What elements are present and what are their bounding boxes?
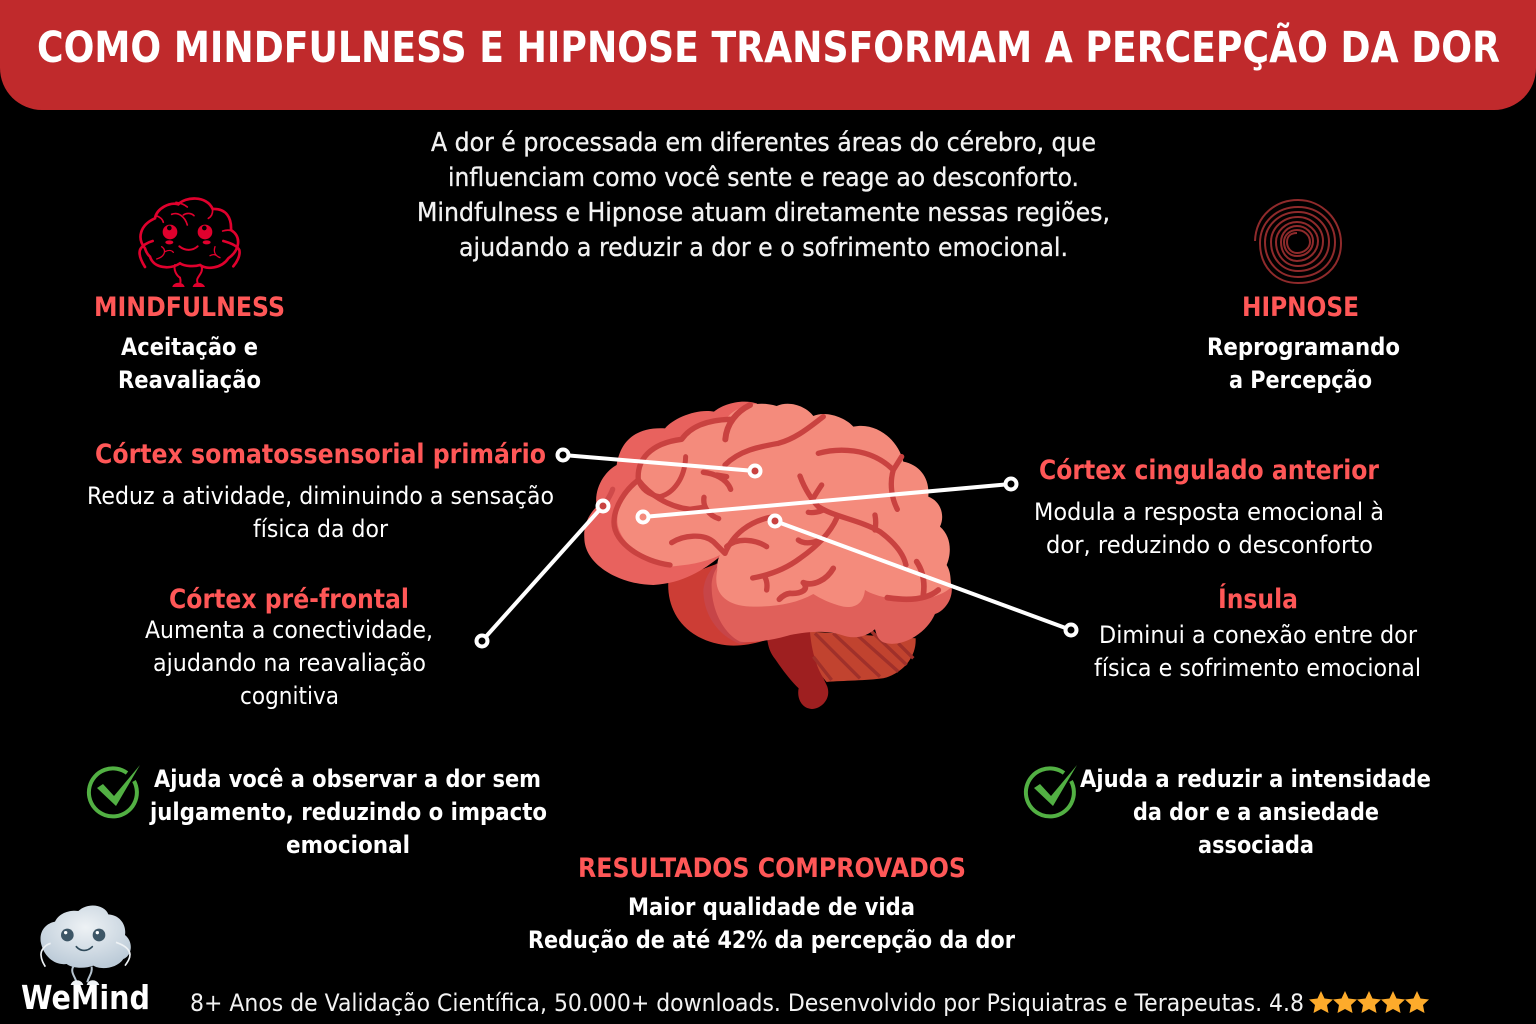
icon: green check left [89, 765, 140, 816]
block: cortex cingulado anterior: dor, reduzindo o desconforto [1046, 531, 1373, 559]
intro text: ajudando a reduzir a dor e o sofrimento emocional. [459, 233, 1068, 263]
block: hipnose benefit: da dor e a ansiedade [1133, 798, 1379, 826]
intro text: A dor é processada em diferentes áreas do cérebro, que [431, 128, 1096, 158]
cortex folds [607, 405, 938, 599]
icon: mindfulness brain mascot [140, 199, 240, 287]
block: insula: Diminui a conexão entre dor [1099, 621, 1417, 649]
block: insula: física e sofrimento emocional [1094, 654, 1421, 682]
cerebellum [810, 632, 916, 682]
block: hipnose benefit [1080, 765, 1431, 859]
title banner [0, 0, 1536, 110]
block: mindfulness benefit: julgamento, reduzindo o impacto [149, 798, 547, 826]
block: cortex pre-frontal [145, 584, 433, 710]
block: mindfulness benefit [149, 765, 547, 859]
panel: mindfulness heading [94, 292, 285, 394]
brain illustration [584, 402, 952, 709]
intro text: Mindfulness e Hipnose atuam diretamente nessas regiões, [417, 198, 1110, 228]
hipnose subtitle: Reprogramando [1207, 333, 1400, 361]
panel: mindfulness heading: MINDFULNESS [94, 292, 285, 323]
panel: hipnose heading: HIPNOSE [1242, 292, 1359, 323]
block: insula: Ínsula [1218, 583, 1298, 615]
block: hipnose benefit: associada [1198, 831, 1314, 859]
mindfulness subtitle: Aceitação e [121, 333, 258, 361]
block: cortex pre-frontal: Córtex pré-frontal [169, 584, 409, 615]
brain stem [767, 630, 828, 709]
block: results: Maior qualidade de vida [628, 893, 915, 921]
mindfulness subtitle: Reavaliação [118, 366, 261, 394]
hipnose subtitle: a Percepção [1229, 366, 1372, 394]
block: hipnose benefit: Ajuda a reduzir a intensidade [1080, 765, 1431, 793]
intro text [417, 128, 1110, 263]
upper cortex light [617, 404, 952, 607]
leader: cingulado [638, 478, 1016, 522]
block: cortex somatossensorial: Reduz a atividade, diminuindo a sensação [87, 482, 554, 510]
frontal outer lobe [584, 402, 803, 585]
block: cortex cingulado anterior: Córtex cingulado anterior [1039, 455, 1380, 486]
block: cortex somatossensorial: Córtex somatossensorial primário [95, 439, 546, 470]
block: mindfulness benefit: emocional [286, 831, 410, 859]
block: cortex somatossensorial: física da dor [253, 515, 388, 543]
panel: hipnose heading [1207, 292, 1400, 394]
block: cortex cingulado anterior [1034, 455, 1384, 559]
temporal dark lobe [668, 557, 767, 646]
lower cortex [712, 540, 952, 644]
leader: somatossensorial [558, 450, 760, 476]
block: results: Redução de até 42% da percepção da dor [528, 926, 1015, 954]
icon: hypnosis spiral [1255, 200, 1341, 283]
block: cortex cingulado anterior: Modula a resposta emocional à [1034, 498, 1384, 526]
logo text: WeMind [21, 978, 150, 1017]
block: cortex pre-frontal: ajudando na reavaliação [153, 649, 426, 677]
leader lines [476, 450, 1076, 646]
mindfulness subtitle [118, 333, 261, 394]
leader: insula [770, 516, 1076, 636]
block: cortex somatossensorial [87, 439, 554, 543]
block: results: RESULTADOS COMPROVADOS [578, 853, 966, 884]
block: insula [1094, 583, 1421, 682]
icon: five stars [1309, 991, 1429, 1013]
footer text: 8+ Anos de Validação Científica, 50.000+ downloads. Desenvolvido por Psiquiatras e Terapeutas. 4.8 [190, 989, 1304, 1017]
block: cortex pre-frontal: cognitiva [240, 682, 339, 710]
block: mindfulness benefit: Ajuda você a observar a dor sem [154, 765, 541, 793]
block: results [528, 853, 1015, 954]
leader: pre-frontal [476, 500, 608, 646]
icon: green check right [1026, 765, 1077, 816]
block: cortex pre-frontal: Aumenta a conectividade, [145, 616, 433, 644]
icon: wemind mascot [41, 905, 131, 985]
intro text: influenciam como você sente e reage ao desconforto. [448, 163, 1079, 193]
hipnose subtitle [1207, 333, 1400, 394]
